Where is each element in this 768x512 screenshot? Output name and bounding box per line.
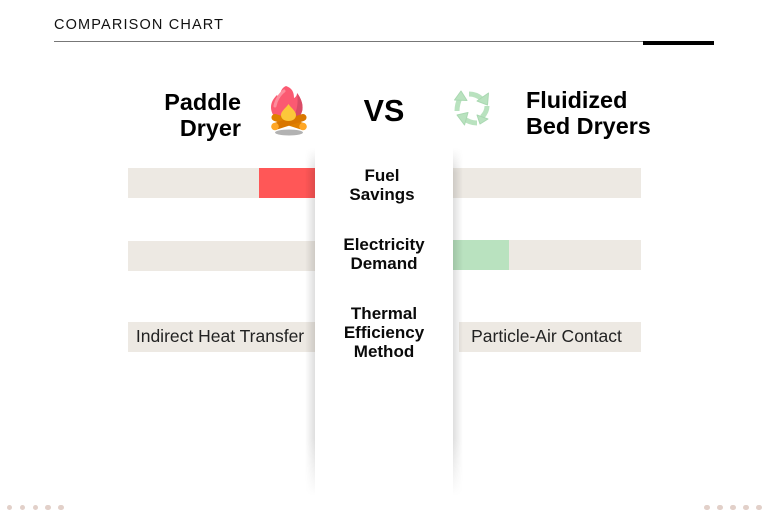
row label: Electricity Demand: Electricity <box>343 235 425 254</box>
row label: Thermal Efficiency Method: Method <box>354 342 414 361</box>
heading: Paddle Dryer: Paddle <box>164 89 241 115</box>
icon: campfire <box>271 86 307 136</box>
row label: Electricity Demand <box>343 235 425 273</box>
heading: Fluidized Bed Dryers: Bed Dryers <box>526 113 651 139</box>
footer dots left <box>7 505 64 510</box>
row label: Fuel Savings <box>349 166 415 204</box>
row label: Thermal Efficiency Method: Thermal <box>351 304 417 323</box>
row bars left and right <box>128 168 641 352</box>
panel: centre column <box>308 154 460 480</box>
footer dots right <box>704 505 762 510</box>
heading: Fluidized Bed Dryers <box>526 87 651 139</box>
value: Particle-Air Contact: Particle-Air Contact <box>471 326 622 346</box>
value: Indirect Heat Transfer: Indirect Heat Transfer <box>136 326 304 346</box>
heading: Fluidized Bed Dryers: Fluidized <box>526 87 627 113</box>
heading: Paddle Dryer <box>164 89 241 141</box>
title: COMPARISON CHART <box>54 17 224 33</box>
row label: Thermal Efficiency Method: Efficiency <box>344 323 424 342</box>
heading: VS: VS <box>364 94 404 128</box>
row label: Fuel Savings: Savings <box>349 185 415 204</box>
row label: Thermal Efficiency Method <box>344 304 424 361</box>
header rule <box>54 41 714 45</box>
icon: recycle arrows <box>454 90 490 126</box>
row label: Fuel Savings: Fuel <box>365 166 399 185</box>
row label: Electricity Demand: Demand <box>350 254 418 273</box>
heading: Paddle Dryer: Dryer <box>180 115 241 141</box>
